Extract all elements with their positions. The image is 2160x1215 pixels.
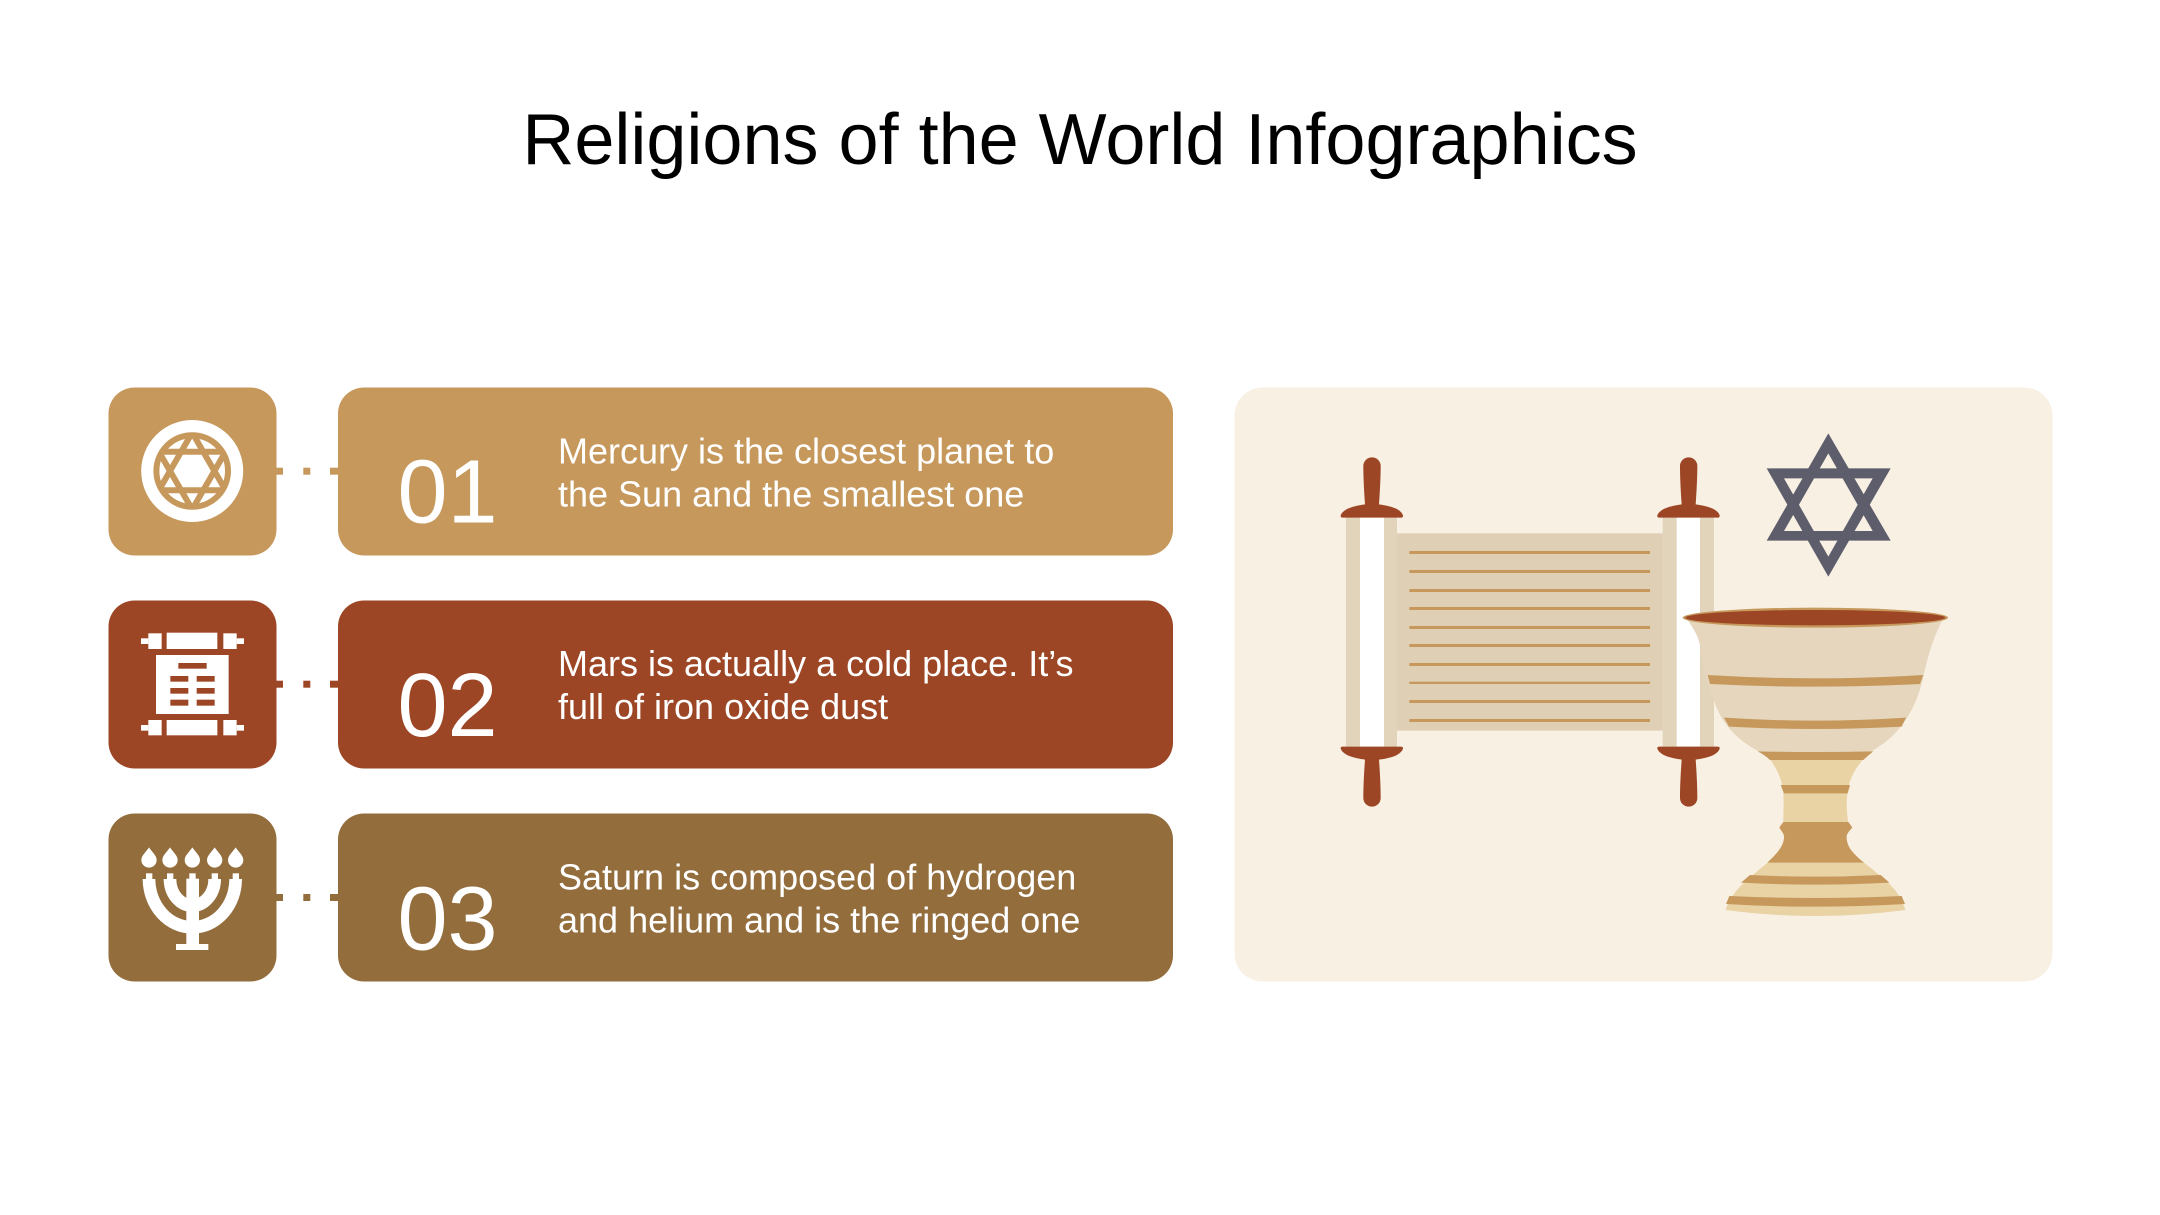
- illustration: star of david: [1767, 433, 1891, 577]
- card 01: Mercury is the closest planet to: [558, 430, 1054, 472]
- card 02: 02: [398, 656, 498, 756]
- illustration: goblet: [1683, 608, 1948, 916]
- card 02: full of iron oxide dust: [558, 686, 888, 727]
- connector dots: [276, 681, 338, 688]
- card 01: the Sun and the smallest one: [558, 474, 1024, 514]
- illustration: torah scroll: [1341, 457, 1720, 807]
- card 03: and helium and is the ringed one: [558, 900, 1080, 941]
- row 2: [108, 600, 1173, 768]
- card 03: [338, 814, 1173, 982]
- icon: torah scroll: [108, 600, 276, 768]
- icon: star of david in circle: [108, 388, 276, 556]
- card 02: [338, 600, 1173, 768]
- panel: illustration: [1234, 388, 2052, 982]
- title: Religions of the World Infographics: [522, 100, 1638, 180]
- card 01: [338, 388, 1173, 556]
- connector dots: [276, 468, 338, 475]
- card 01: 01: [398, 443, 498, 543]
- connector dots: [276, 894, 338, 901]
- row 1: [108, 388, 1173, 556]
- card 03: 03: [398, 869, 498, 969]
- row 3: [108, 814, 1173, 982]
- card 03: Saturn is composed of hydrogen: [558, 856, 1076, 898]
- card 02: Mars is actually a cold place. It’s: [558, 643, 1074, 684]
- icon: menorah: [108, 814, 276, 982]
